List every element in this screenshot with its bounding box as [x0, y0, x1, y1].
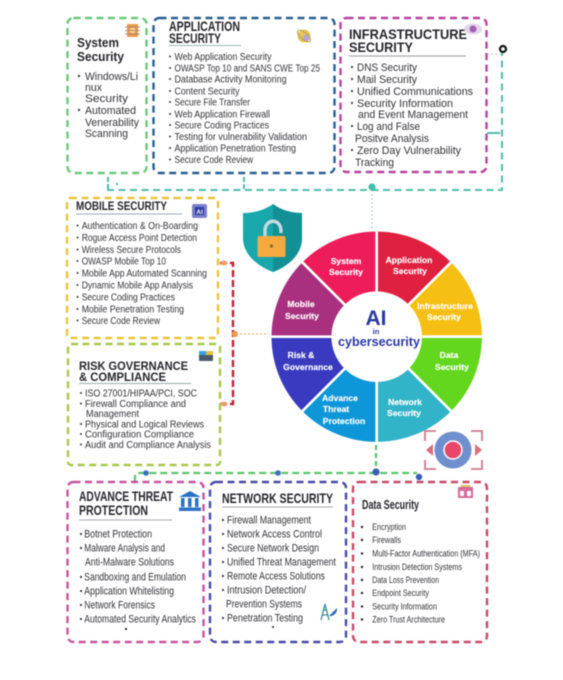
text: network security list: Network Access Control — [227, 528, 322, 540]
heading: infrastructure security: SECURITY — [349, 39, 414, 55]
text: risk governance list: Firewall Compliance and — [85, 399, 186, 410]
heading: advance threat protection: PROTECTION — [79, 502, 148, 518]
text: network security list: Firewall Management — [227, 514, 311, 526]
segment: data security — [408, 337, 483, 412]
segment: mobile security: Security — [285, 311, 319, 321]
text: advance threat list: Network Forensics — [84, 600, 155, 612]
icon: antenna tower — [321, 604, 337, 620]
icon: shop — [458, 485, 473, 498]
segment: infrastructure security: Security — [427, 312, 461, 322]
text: advance threat list: Application Whitelisting — [84, 586, 174, 598]
text: network security list: Prevention Systems — [226, 598, 302, 610]
text: mobile security list: Dynamic Mobile App Analysis — [82, 280, 193, 292]
chart: AI in cybersecurity wheel — [270, 230, 483, 443]
text: data security list: Intrusion Detection Systems — [372, 562, 462, 572]
center label: cybersecurity — [338, 334, 421, 349]
connector: red dashed link between mobile and risk panels — [220, 261, 270, 406]
text: infrastructure security list: Positve Analysis — [355, 133, 429, 145]
icon: eye — [464, 24, 482, 34]
text: risk governance list: Physical and Logical Reviews — [85, 420, 204, 430]
segment: mobile security: Mobile — [287, 299, 315, 309]
text: application security list: Content Security — [174, 86, 240, 98]
text: data security list: Data Loss Prevention — [372, 575, 439, 585]
text: data security list: Multi-Factor Authentication (MFA) — [372, 548, 480, 558]
text: mobile security list: Authentication & On-Boarding — [82, 221, 198, 232]
segment: system security: Security — [329, 267, 363, 277]
text: network security list — [222, 514, 336, 628]
text: system security list: Automated — [85, 105, 136, 117]
text: infrastructure security list — [351, 62, 473, 169]
text: advance threat list: Automated Security Analytics — [84, 614, 196, 626]
text: mobile security list: Mobile Penetration Testing — [82, 304, 184, 316]
text: advance threat list: Sandboxing and Emulation — [84, 572, 186, 584]
text: network security list: Unified Threat Management — [227, 556, 336, 568]
text: application security list: Web Application Security — [174, 52, 272, 63]
text: application security list — [169, 52, 320, 166]
text: advance threat list: Anti-Malware Solutions — [85, 556, 174, 568]
text: infrastructure security list: Zero Day Vulnerability — [357, 145, 461, 157]
text: infrastructure security list: Security Information — [357, 98, 453, 110]
text: mobile security list — [76, 221, 207, 327]
text: infrastructure security list: Unified Communications — [357, 86, 473, 98]
heading: risk governance and compliance: RISK GOVERNANCE — [79, 359, 188, 373]
text: application security list: Application Penetration Testing — [174, 144, 296, 154]
segment: network security: Network — [388, 397, 422, 407]
panel: application security — [154, 18, 334, 173]
text: data security list: Security Information — [372, 602, 437, 612]
icon: orange chip — [125, 24, 140, 37]
heading: advance threat protection: ADVANCE THREAT — [79, 488, 173, 504]
text: data security list: Endpoint Security — [372, 588, 429, 598]
text: network security list: Remote Access Solutions — [227, 570, 325, 582]
icon: globe — [296, 28, 312, 44]
text: infrastructure security list: Mail Security — [357, 74, 417, 86]
text: risk governance list: Audit and Compliance Analysis — [85, 440, 211, 451]
icon: bank building — [179, 491, 201, 511]
text: application security list: Secure File Transfer — [174, 98, 251, 108]
segment: advance threat protection — [301, 368, 377, 443]
segment: system security: System — [331, 256, 362, 266]
text: application security list: Secure Coding Practices — [174, 120, 269, 132]
text: data security list: Zero Trust Architecture — [372, 614, 445, 624]
text: advance threat list: Botnet Protection — [84, 528, 152, 540]
text: network security list: Secure Network Design — [227, 542, 319, 554]
text: risk governance list: Management — [86, 409, 139, 420]
text: network security list: Penetration Testing — [227, 612, 303, 624]
text: system security list: Windows/Li — [85, 71, 138, 83]
heading: application security: APPLICATION — [169, 18, 240, 34]
text: network security list: Intrusion Detection/ — [227, 584, 307, 596]
text: infrastructure security list: Tracking — [355, 157, 394, 169]
panel: system security — [68, 18, 146, 173]
segment: advance threat protection: Advance — [322, 393, 358, 403]
text: application security list: Testing for vulnerability Validation — [174, 132, 307, 143]
panel: mobile security — [67, 198, 218, 338]
text: mobile security list: Rogue Access Point Detection — [82, 233, 197, 244]
text: risk governance list: ISO 27001/HIPAA/PCI, SOC — [85, 388, 197, 400]
text: mobile security list: Wireless Secure Protocols — [82, 245, 181, 256]
segment: application security: Security — [393, 266, 427, 276]
text: advance threat list — [80, 528, 196, 630]
text: infrastructure security list: DNS Security — [357, 62, 417, 74]
panel: infrastructure security — [340, 18, 486, 172]
text: system security list: Security — [85, 93, 129, 105]
icon: target with brackets — [425, 431, 482, 469]
segment: system security — [301, 230, 377, 306]
text: mobile security list: OWASP Mobile Top 10 — [82, 256, 166, 268]
segment: mobile security — [270, 261, 346, 337]
heading: risk governance and compliance: & COMPLIANCE — [79, 370, 166, 384]
segment: data security: Security — [435, 362, 469, 372]
text: application security list: Secure Code Review — [174, 155, 254, 166]
panel: risk governance and compliance — [68, 344, 220, 465]
text: mobile security list: Secure Coding Practices — [82, 292, 175, 304]
panel: advance threat protection — [68, 482, 204, 642]
text: system security list: Venerability — [85, 117, 139, 129]
text: system security list: nux — [85, 82, 102, 94]
heading: data security: Data Security — [362, 498, 419, 512]
connector: top teal dashed line — [107, 46, 506, 228]
heading: infrastructure security: INFRASTRUCTURE — [349, 26, 467, 42]
segment: network security — [377, 368, 452, 443]
heading: system security: System — [77, 36, 119, 50]
center label: AI — [366, 307, 386, 330]
center label: in — [373, 327, 380, 336]
text: infrastructure security list: Log and False — [357, 121, 420, 133]
icon: AI chip: AI — [196, 209, 203, 216]
text: application security list: OWASP Top 10 and SANS CWE Top 25 — [174, 64, 320, 74]
segment: advance threat protection: Protection — [323, 416, 365, 426]
segment: application security — [377, 230, 452, 306]
heading: network security: NETWORK SECURITY — [222, 490, 333, 506]
text: system security list: Scanning — [85, 128, 128, 140]
segment: advance threat protection: Threat — [323, 404, 349, 414]
heading: system security — [77, 36, 124, 64]
segment: risk and governance — [270, 337, 346, 412]
segment: risk and governance: Risk & — [288, 350, 314, 360]
text: application security list: Database Activity Monitoring — [174, 74, 286, 86]
text: data security list: Encryption — [372, 522, 406, 532]
segment: risk and governance: Governance — [283, 362, 333, 372]
icon: briefcase — [199, 351, 213, 361]
text: mobile security list: Mobile App Automated Scanning — [82, 268, 207, 280]
heading: system security: Security — [77, 50, 124, 64]
text: risk governance list: Configuration Compliance — [85, 430, 194, 440]
text: advance threat list: Malware Analysis and — [84, 542, 165, 554]
heading: application security — [169, 18, 241, 46]
segment: infrastructure security — [408, 261, 483, 337]
heading: infrastructure security — [349, 26, 467, 56]
connector: bottom green dashed line — [135, 445, 422, 482]
center label — [333, 293, 421, 381]
segment: application security: Application — [386, 255, 432, 265]
heading: application security: SECURITY — [169, 30, 221, 46]
text: system security list — [78, 71, 139, 140]
heading: mobile security: MOBILE SECURITY — [76, 199, 167, 213]
text: mobile security list: Secure Code Review — [82, 316, 161, 327]
icon: shield with open padlock — [243, 204, 302, 272]
text: risk governance list — [80, 388, 211, 451]
segment: network security: Security — [387, 408, 421, 418]
text: data security list — [361, 522, 480, 624]
segment: infrastructure security: Infrastructure — [417, 301, 473, 311]
panel: data security — [353, 482, 487, 642]
heading: advance threat protection — [79, 488, 173, 520]
panel: network security — [210, 482, 346, 642]
heading: risk governance and compliance — [79, 359, 191, 384]
icon: AI chip — [192, 204, 207, 218]
text: data security list: Firewalls — [372, 535, 401, 545]
text: infrastructure security list: and Event Management — [358, 109, 468, 121]
segment: data security: Data — [440, 350, 459, 360]
text: application security list: Web Application Firewall — [174, 110, 270, 120]
